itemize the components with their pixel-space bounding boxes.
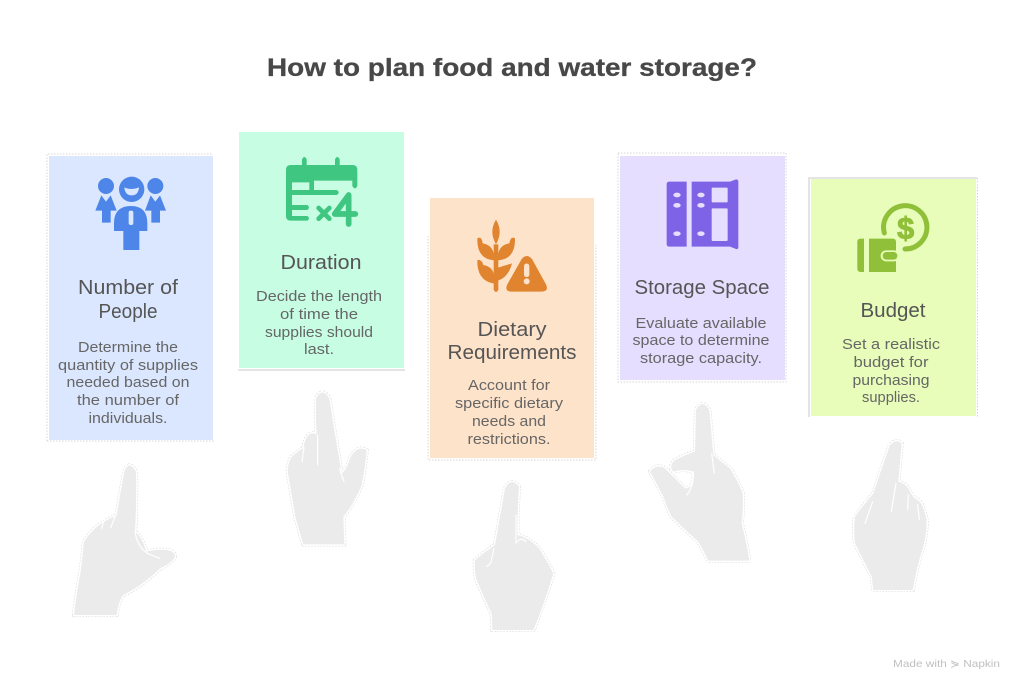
description bbox=[256, 288, 382, 358]
description: specific dietary bbox=[455, 395, 564, 412]
description: needed based on bbox=[66, 374, 190, 391]
description: supplies should bbox=[265, 324, 373, 341]
heading: Number of bbox=[78, 277, 178, 299]
icon: wallet and coin: $ bbox=[897, 211, 914, 245]
description: individuals. bbox=[88, 410, 168, 427]
icon: people group bbox=[95, 177, 166, 250]
description: of time the bbox=[280, 306, 358, 323]
panel: budget bbox=[809, 178, 978, 417]
description: supplies. bbox=[862, 389, 920, 406]
panel: storage space bbox=[618, 153, 786, 382]
description: Decide the length bbox=[256, 288, 382, 305]
description: restrictions. bbox=[468, 431, 550, 448]
heading: People bbox=[98, 301, 158, 323]
heading: Dietary bbox=[478, 319, 546, 341]
description: quantity of supplies bbox=[58, 357, 198, 374]
icon: calendar x4 bbox=[286, 157, 357, 224]
watermark: Made with ⋟ Napkin bbox=[893, 658, 1000, 670]
description: Account for bbox=[468, 377, 550, 394]
heading: Storage Space bbox=[634, 277, 770, 299]
icon: pointing hand 5 bbox=[854, 441, 927, 590]
description: space to determine bbox=[632, 332, 770, 349]
icon: pointing hand 4 bbox=[650, 404, 749, 561]
title: How to plan food and water storage? bbox=[267, 54, 757, 82]
icon: pointing hand 1 bbox=[74, 465, 175, 615]
description: the number of bbox=[77, 392, 180, 409]
description: Evaluate available bbox=[636, 315, 766, 332]
description: Set a realistic bbox=[842, 336, 941, 353]
icon: wallet and coin bbox=[857, 206, 927, 272]
description: last. bbox=[304, 341, 334, 358]
description bbox=[632, 315, 770, 367]
heading: Duration bbox=[280, 252, 362, 274]
description: budget for bbox=[854, 354, 928, 371]
description: Determine the bbox=[78, 339, 178, 356]
panel: number of people bbox=[47, 154, 214, 441]
panel: duration bbox=[238, 132, 405, 370]
heading: Budget bbox=[860, 300, 926, 322]
description bbox=[842, 336, 941, 406]
icon: pointing hand 2 bbox=[288, 392, 367, 544]
heading bbox=[78, 277, 178, 323]
panel: dietary requirements bbox=[428, 198, 596, 460]
description: storage capacity. bbox=[640, 350, 762, 367]
description: needs and bbox=[472, 413, 546, 430]
heading bbox=[448, 319, 576, 364]
icon: storage cabinet bbox=[667, 179, 738, 249]
icon: pointing hand 3 bbox=[475, 482, 553, 630]
description: purchasing bbox=[852, 372, 930, 389]
description bbox=[58, 339, 198, 427]
heading: Requirements bbox=[448, 342, 576, 364]
icon: wheat with warning bbox=[477, 220, 547, 292]
description bbox=[455, 377, 564, 448]
